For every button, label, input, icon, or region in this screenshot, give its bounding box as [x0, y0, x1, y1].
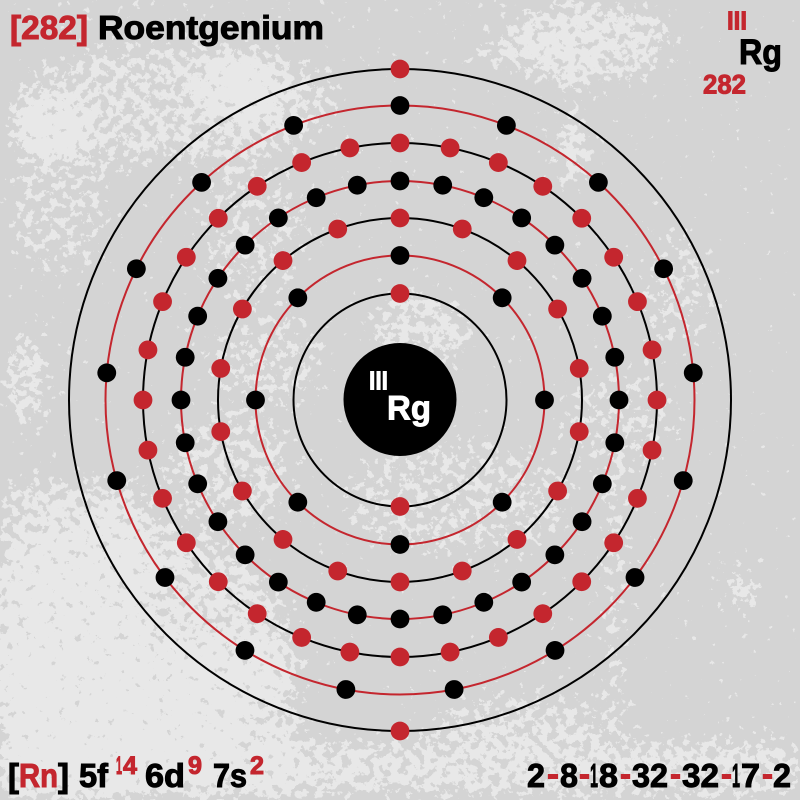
electron configuration: ]: [58, 757, 69, 794]
electron configuration: 5f: [79, 757, 109, 794]
electron configuration: Rn: [19, 757, 58, 794]
electrons per shell: 8: [560, 757, 578, 794]
electron configuration: 6d: [145, 757, 185, 794]
electrons per shell: -: [762, 755, 773, 792]
electrons per shell: 7: [741, 757, 760, 794]
element key: atomic number, symbol, mass: 282: [703, 70, 746, 100]
electrons per shell: 1: [590, 757, 598, 794]
element key: atomic number, symbol, mass: Rg: [739, 33, 782, 72]
shell 3 electrons (18): [210, 209, 590, 591]
electrons per shell: [527, 755, 791, 794]
shell 6 electrons (17): [97, 96, 703, 700]
electron configuration: 7s: [213, 757, 247, 794]
nucleus with element symbol: Rg: [387, 390, 431, 428]
element key: atomic number, symbol, mass: [703, 6, 782, 100]
electron configuration: 4: [123, 752, 137, 780]
title: atomic mass and element name: [10, 9, 324, 46]
shell 2 electrons (8): [246, 246, 554, 554]
electrons per shell: -: [721, 755, 732, 792]
nucleus with element symbol: III: [369, 366, 388, 396]
electrons per shell: -: [547, 755, 559, 792]
shell 5 electrons (32): [134, 134, 666, 666]
electron configuration: 2: [250, 752, 264, 780]
electron configuration: 1: [116, 752, 122, 780]
electron configuration: [8, 752, 264, 794]
electrons per shell: 2: [773, 757, 791, 794]
rings: seven electron shell orbits: [69, 69, 731, 731]
nucleus with element symbol: [344, 343, 456, 456]
title: atomic mass and element name: [282]: [10, 9, 88, 46]
electrons per shell: 2: [527, 757, 545, 794]
electrons per shell: 8: [599, 757, 618, 794]
electrons per shell: 1: [732, 757, 740, 794]
electron configuration: 9: [188, 752, 202, 780]
electrons per shell: 32: [682, 757, 719, 794]
title: atomic mass and element name: Roentgenium: [98, 9, 324, 46]
electrons per shell: -: [620, 755, 631, 792]
shell 7 electrons (2): [391, 60, 409, 740]
element key: atomic number, symbol, mass: III: [727, 6, 747, 36]
electrons per shell: -: [670, 755, 681, 792]
electrons per shell: 32: [632, 757, 668, 794]
shell 4 electrons (32): [172, 172, 628, 628]
shell 1 electrons (2): [391, 284, 409, 516]
electrons per shell: -: [579, 755, 590, 792]
electron configuration: [: [8, 757, 19, 794]
